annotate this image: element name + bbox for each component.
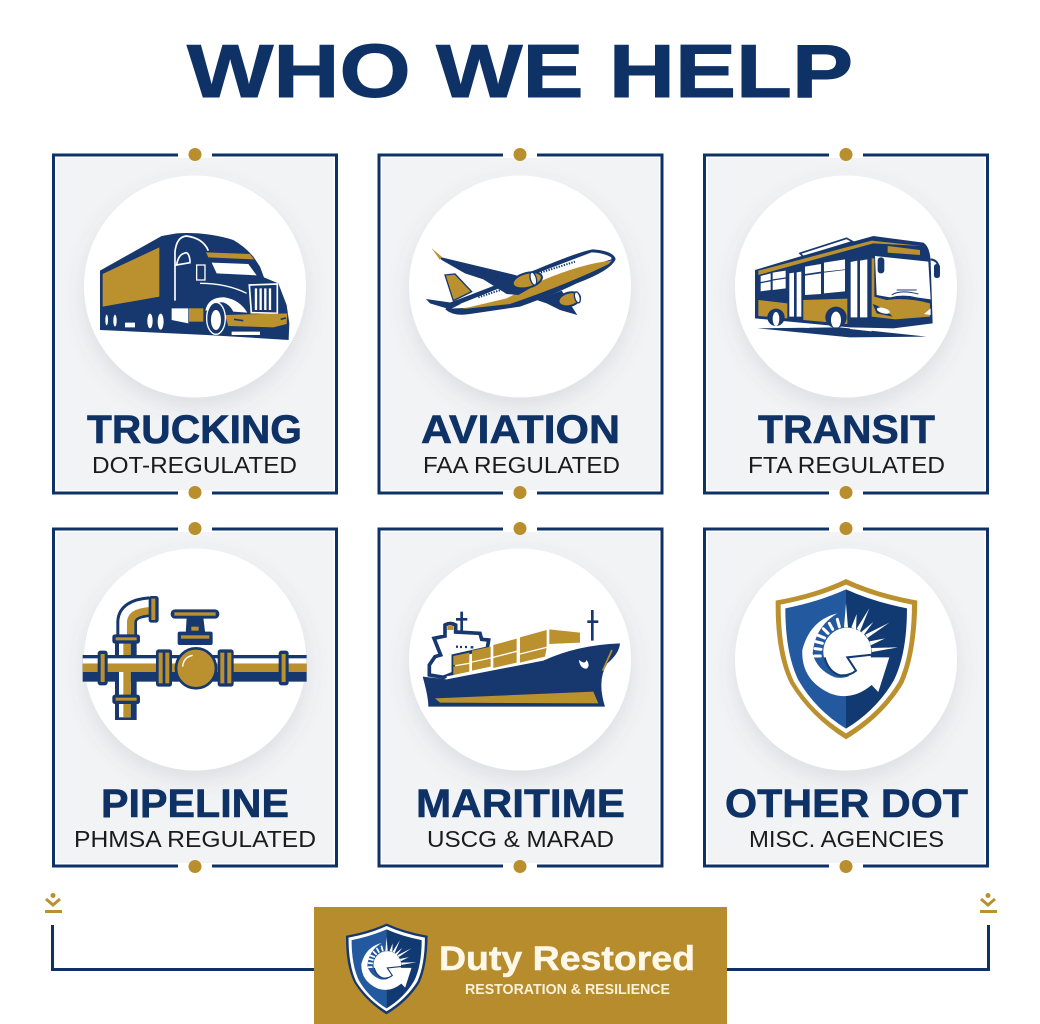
footer badge xyxy=(314,907,727,1024)
subtext: misc. agencies: MISC. AGENCIES xyxy=(749,826,944,852)
heading: other dot: OTHER DOT xyxy=(725,782,968,826)
subtext: dot-regulated: DOT-REGULATED xyxy=(92,452,297,478)
icon: airplane xyxy=(426,248,616,315)
panel: maritime xyxy=(379,522,662,873)
connector: right xyxy=(727,925,988,970)
subtext: phmsa regulated: PHMSA REGULATED xyxy=(74,826,316,852)
heading: trucking: TRUCKING xyxy=(87,408,302,452)
icon: left marker xyxy=(45,893,62,912)
heading: transit: TRANSIT xyxy=(758,408,935,452)
brand name: Duty Restored xyxy=(439,940,695,978)
subtext: uscg & marad: USCG & MARAD xyxy=(427,826,614,852)
icon: footer shield xyxy=(346,924,428,1014)
icon: bus xyxy=(755,236,940,337)
subtext: fta regulated: FTA REGULATED xyxy=(748,452,945,478)
heading: maritime: MARITIME xyxy=(416,782,625,826)
icon: right marker xyxy=(980,893,997,912)
tagline: RESTORATION & RESILIENCE xyxy=(465,982,670,998)
title: WHO WE HELP xyxy=(187,29,853,113)
panel: pipeline xyxy=(54,522,336,873)
panel: transit xyxy=(704,148,988,499)
icon: truck xyxy=(100,233,289,340)
heading: pipeline: PIPELINE xyxy=(101,782,289,826)
panel: other dot xyxy=(704,522,988,873)
heading: aviation: AVIATION xyxy=(421,408,620,452)
connector: left xyxy=(52,925,314,970)
icon: cargo ship xyxy=(423,610,620,707)
icon: pipeline valve xyxy=(83,596,307,720)
panel: aviation xyxy=(379,148,662,499)
subtext: faa regulated: FAA REGULATED xyxy=(423,452,620,478)
panel: trucking xyxy=(54,148,336,499)
icon: shield xyxy=(776,579,917,739)
